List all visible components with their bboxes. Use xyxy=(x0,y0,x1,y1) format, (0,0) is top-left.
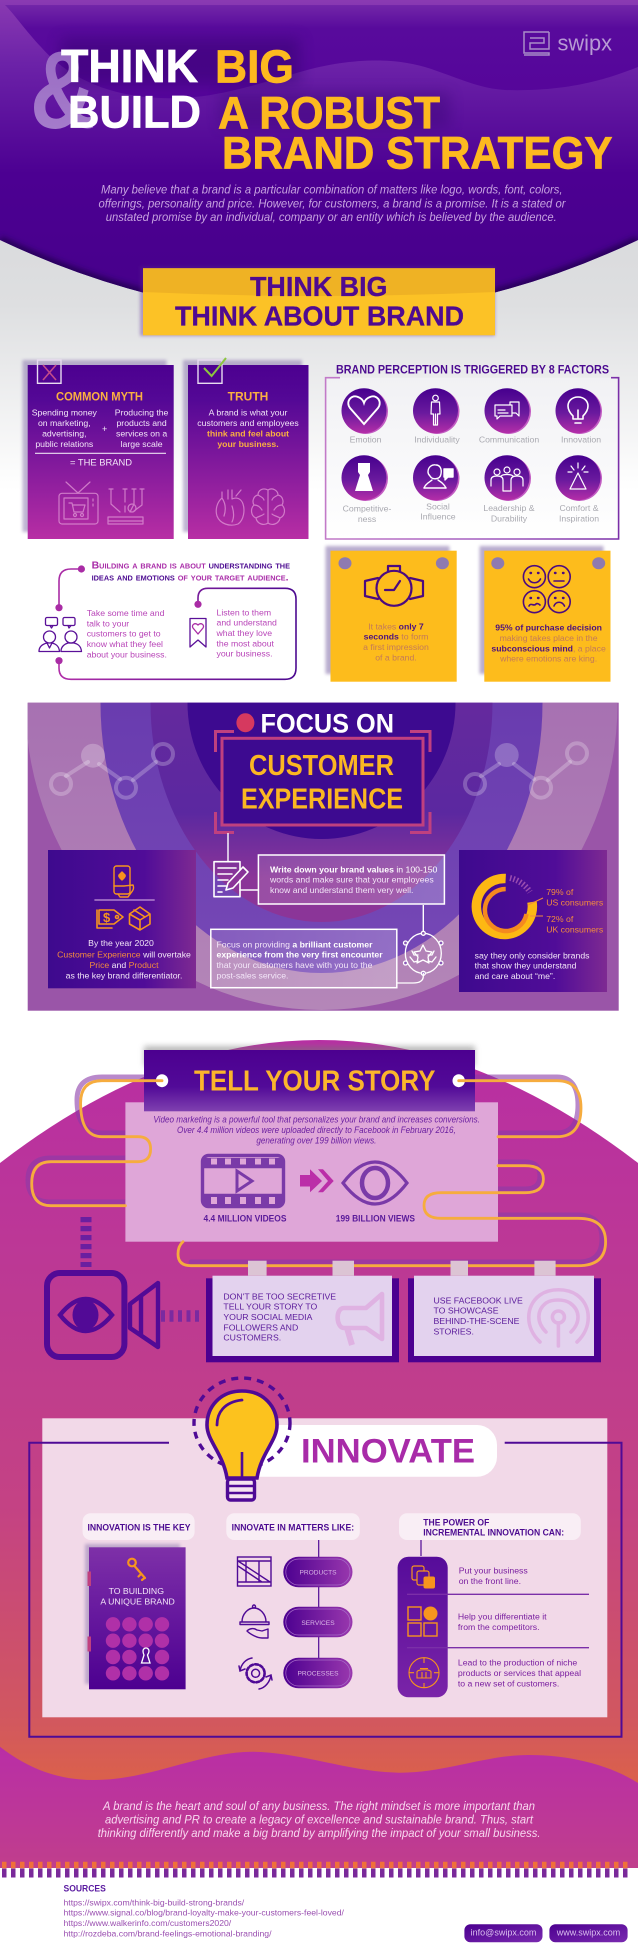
pill: power of incremental innovation: THE POWER OF xyxy=(423,1517,490,1527)
text: customer experience overtake xyxy=(57,938,191,980)
logo: swipx xyxy=(524,31,612,56)
dotted line: horizontal xyxy=(161,1310,202,1322)
box: brilliant experience: experience from the very first encounter xyxy=(216,950,383,960)
pill: innovate heading xyxy=(240,1425,497,1477)
text: purchase decision: 95% of purchase decision xyxy=(495,623,602,633)
text: take some time: talk to your xyxy=(87,618,129,628)
card: consumers xyxy=(459,850,607,992)
panel: tell your story xyxy=(125,1102,498,1242)
text: differentiate: Help you differentiate it xyxy=(458,1612,547,1622)
text: facebook live: BEHIND-THE-SCENE xyxy=(434,1316,520,1326)
card: don't be too secretive xyxy=(206,1261,399,1362)
factor: leadership: Durability xyxy=(491,513,528,523)
text: facebook live: USE FACEBOOK LIVE xyxy=(434,1295,523,1305)
button: website xyxy=(549,1924,628,1942)
pill: processes: PROCESSES xyxy=(297,1671,339,1678)
connector line: loop xyxy=(55,588,296,679)
text: customer experience overtake: as the key brand differentiator. xyxy=(66,970,182,980)
pill: power of incremental innovation: INCREMENTAL INNOVATION CAN: xyxy=(423,1528,564,1538)
icon: gears xyxy=(239,1658,272,1689)
title: BRAND STRATEGY xyxy=(222,127,612,178)
label: videos: 4.4 MILLION VIDEOS xyxy=(204,1214,286,1224)
title: BIG xyxy=(215,41,294,93)
icon: watch xyxy=(365,566,423,606)
heading: building a brand: ideas and emotions of your target audience. xyxy=(92,573,289,584)
text: listen to them: Listen to them xyxy=(216,607,271,617)
text: front line xyxy=(459,1566,528,1586)
text: take some time xyxy=(87,608,167,659)
story text: generating over 199 billion views. xyxy=(256,1135,376,1146)
factor: competitiveness: Competitive- xyxy=(343,504,391,514)
heading: brand perception: BRAND PERCEPTION IS TRIGGERED BY 8 FACTORS xyxy=(336,363,609,377)
text: take some time: customers to get to xyxy=(87,629,161,639)
story text: Over 4.4 million videos were uploaded directly to Facebook in February 2016, xyxy=(177,1125,456,1136)
icon: ribbon heart xyxy=(190,618,206,647)
text: 7 seconds: seconds to form xyxy=(364,632,428,642)
divider lines xyxy=(407,1594,589,1648)
tall pill with icons xyxy=(398,1557,448,1697)
myth right text: services on a xyxy=(116,429,167,439)
note: 95 percent xyxy=(480,546,610,682)
text: differentiate xyxy=(458,1612,547,1632)
conclusion text: advertising and PR to create a legacy of excellence and sustainable brand. Thus, start xyxy=(105,1812,534,1826)
box: brand values xyxy=(258,855,444,904)
box: brand values: words and make sure that your employees xyxy=(269,875,434,885)
sources: https://www.walkerinfo.com/customers2020/ xyxy=(64,1918,232,1928)
banner: think big think about brand xyxy=(140,266,495,336)
factor: social influence xyxy=(413,455,460,522)
intro text xyxy=(98,183,566,224)
text: consumers: and care about “me”. xyxy=(475,971,555,981)
icon: phone xyxy=(114,866,134,897)
factor: comfort xyxy=(556,455,602,523)
icon: people talking xyxy=(39,618,82,652)
panel: 8 factors xyxy=(326,378,619,539)
myth right text xyxy=(115,408,169,449)
logo: swipx: swipx xyxy=(558,31,612,56)
myth right text: Producing the xyxy=(115,408,169,418)
magenta background arc xyxy=(0,1040,638,1790)
truth text: customers and employees xyxy=(197,418,299,428)
text: purchase decision: making takes place in the xyxy=(500,633,598,643)
text: 7 seconds: a first impression xyxy=(363,642,429,652)
text: facebook live: STORIES. xyxy=(434,1326,474,1336)
factor: comfort: Inspiration xyxy=(559,513,599,523)
box: brilliant experience: Focus on providing a brilliant customer xyxy=(216,939,373,949)
icon: megaphone xyxy=(338,1294,382,1345)
text: to building: TO BUILDING xyxy=(109,1586,164,1596)
text: customer experience overtake: Customer Experience will overtake xyxy=(57,950,191,960)
rope shadow right xyxy=(191,1077,602,1262)
zipper edge xyxy=(2,1865,632,1873)
box: brand values: know and understand them very well. xyxy=(270,885,413,895)
text: take some time: know what they feel xyxy=(87,639,163,649)
text: niche products: to a new set of customers. xyxy=(458,1678,559,1688)
factor: competitiveness: ness xyxy=(358,514,377,524)
bottom wave xyxy=(0,1747,638,1868)
text: purchase decision: where emotions are king. xyxy=(499,654,597,664)
factor: communication xyxy=(479,388,539,444)
factor: individuality xyxy=(413,388,460,444)
arrow xyxy=(300,1169,334,1192)
truth text xyxy=(197,408,299,449)
text: customer experience overtake: By the year 2020 xyxy=(88,938,154,948)
sources: https://swipx.com/think-big-build-strong-brands/ xyxy=(64,1897,245,1907)
donut labels: US consumers xyxy=(546,897,604,907)
myth left text: on marketing, xyxy=(38,418,91,428)
icon: price tag and box xyxy=(97,907,150,930)
intro text: offerings, personality and price. However, for customers, a brand is a promise. It is a stated or xyxy=(98,196,566,210)
factor: communication: Communication xyxy=(479,434,539,444)
note: 7 seconds xyxy=(326,546,457,682)
gray backdrop band xyxy=(0,225,638,490)
icon: keyhole xyxy=(142,1648,150,1663)
sources: SOURCES xyxy=(64,1884,106,1894)
text: listen to them: the most about xyxy=(216,638,275,648)
icon: heart organ xyxy=(216,490,244,525)
text: niche products xyxy=(458,1658,581,1688)
title: THINK xyxy=(61,40,198,92)
icon: crate xyxy=(238,1557,271,1586)
frame: customer experience xyxy=(216,732,430,832)
heading: truth: TRUTH xyxy=(228,390,268,404)
box: brilliant experience xyxy=(211,929,397,988)
box: brilliant experience: that your customers have with you to the xyxy=(216,960,373,970)
banner: think big think about brand: THINK ABOUT BRAND xyxy=(175,301,464,332)
text: consumers xyxy=(475,950,590,981)
myth left text: public relations xyxy=(35,439,94,449)
heading: building a brand: Building a brand is about understanding the xyxy=(92,560,290,571)
icon: eye xyxy=(343,1162,407,1204)
text: secretive xyxy=(223,1291,336,1343)
conclusion text: A brand is the heart and soul of any business. The right mindset is more important than xyxy=(102,1799,535,1813)
header panel xyxy=(0,0,638,316)
text: listen to them: and understand xyxy=(216,618,277,628)
icon: shapes xyxy=(408,1606,438,1636)
text: purchase decision: subconscious mind, a place xyxy=(491,643,606,653)
donut labels: UK consumers xyxy=(546,924,604,934)
factor: innovation: Innovation xyxy=(561,434,601,444)
heading: focus on: FOCUS ON xyxy=(260,709,394,739)
banner: think big think about brand: THINK BIG xyxy=(250,271,388,302)
factor: comfort: Comfort & xyxy=(559,503,599,513)
truth text: your business. xyxy=(217,439,279,449)
text: secretive: YOUR SOCIAL MEDIA xyxy=(223,1312,313,1322)
myth left text: Spending money xyxy=(32,408,98,418)
text: secretive: TELL YOUR STORY TO xyxy=(223,1302,317,1312)
intro text: Many believe that a brand is a particular combination of matters like logo, words, font, colors, xyxy=(101,183,562,197)
panel: common myth xyxy=(22,360,174,539)
text: differentiate: from the competitors. xyxy=(458,1622,540,1632)
truth text: think and feel about xyxy=(207,429,289,439)
title ampersand: & xyxy=(30,29,96,152)
pill: innovation is the key xyxy=(83,1513,195,1540)
sources: http://rozdeba.com/brand-feelings-emotional-branding/ xyxy=(64,1928,272,1938)
icon: check box xyxy=(198,358,226,383)
pill: services: SERVICES xyxy=(301,1620,335,1627)
factor: social influence: Social xyxy=(426,501,450,511)
intro text: unstated promise by an individual, company or an entity which is believed by the audience. xyxy=(106,210,557,224)
icon: cloche xyxy=(240,1605,269,1638)
donut labels: 72% of xyxy=(546,914,574,924)
banner: tell your story: TELL YOUR STORY xyxy=(194,1066,436,1098)
pill: services xyxy=(283,1607,352,1637)
text: secretive: DON'T BE TOO SECRETIVE xyxy=(223,1291,336,1301)
plus sign: + xyxy=(102,424,107,434)
factor: emotion: Emotion xyxy=(350,434,382,444)
text: secretive: FOLLOWERS AND xyxy=(223,1322,298,1332)
dollar sign: $ xyxy=(103,910,111,925)
donut labels xyxy=(546,887,604,934)
text: 7 seconds xyxy=(363,621,429,662)
text: listen to them xyxy=(216,607,277,659)
sources xyxy=(64,1884,345,1938)
text: unique brand: A UNIQUE BRAND xyxy=(100,1596,175,1606)
title xyxy=(61,40,612,178)
pill: power of incremental innovation xyxy=(399,1513,581,1540)
text: facebook live xyxy=(434,1295,523,1336)
icon: light bulb xyxy=(194,1378,290,1500)
box: brilliant experience: post-sales service. xyxy=(216,970,288,980)
icon: broadcast xyxy=(529,1290,588,1346)
myth right text: products and xyxy=(116,418,167,428)
icon: brain xyxy=(252,489,284,524)
text: niche products: products or services that appeal xyxy=(458,1668,581,1678)
text: consumers: that show they understand xyxy=(475,961,577,971)
factor: leadership: Leadership & xyxy=(483,503,535,513)
icon: tv xyxy=(59,482,98,524)
card: year 2020 xyxy=(48,850,196,988)
text: 7 seconds: of a brand. xyxy=(375,652,417,662)
heading: building a brand xyxy=(92,560,290,584)
myth right text: large scale xyxy=(121,439,163,449)
story text: Video marketing is a powerful tool that personalizes your brand and increases conversions. xyxy=(153,1115,480,1126)
button: email xyxy=(464,1924,542,1942)
panel: innovate xyxy=(29,1378,622,1737)
panel: truth xyxy=(183,358,308,539)
myth left text xyxy=(32,408,98,449)
concentric arcs xyxy=(28,702,618,1010)
heading: common myth: COMMON MYTH xyxy=(56,390,143,404)
icon: star ring xyxy=(397,931,443,983)
pill: products xyxy=(283,1557,352,1587)
icon: target xyxy=(409,1658,439,1688)
the brand equation: = THE BRAND xyxy=(70,457,132,468)
rope left xyxy=(32,1081,162,1206)
donut chart xyxy=(476,878,543,934)
banner: tell your story xyxy=(144,1046,475,1111)
icon: faces xyxy=(523,566,570,613)
factor: competitiveness xyxy=(342,455,391,524)
text: 7 seconds: It takes only 7 xyxy=(368,621,424,631)
donut labels: 79% of xyxy=(546,887,574,897)
factor: social influence: Influence xyxy=(420,512,456,522)
conclusion text xyxy=(98,1799,540,1840)
text: niche products: Lead to the production of niche xyxy=(458,1658,577,1668)
rope right xyxy=(178,1081,606,1266)
icon: video camera xyxy=(47,1273,158,1357)
text: listen to them: what they love xyxy=(216,628,272,638)
factor: individuality: Individuality xyxy=(414,434,460,444)
rope shadow left xyxy=(28,1077,162,1202)
truth text: A brand is what your xyxy=(209,408,287,418)
text: consumers: say they only consider brands xyxy=(475,950,590,960)
label: views: 199 BILLION VIEWS xyxy=(336,1214,415,1224)
connector line: left top xyxy=(55,565,85,611)
factor: innovation xyxy=(556,388,602,444)
text: front line: Put your business xyxy=(459,1566,528,1576)
sources: https://www.signal.co/blog/brand-loyalty-make-your-customers-feel-loved/ xyxy=(64,1908,345,1918)
panel: focus on customer experience xyxy=(28,702,619,1011)
icon: document and pencil xyxy=(214,862,258,897)
text: take some time: Take some time and xyxy=(87,608,165,618)
network graphic right xyxy=(465,743,587,798)
pill: innovation is the key: INNOVATION IS THE KEY xyxy=(88,1522,190,1532)
text: facebook live: TO SHOWCASE xyxy=(434,1306,499,1316)
icon: film xyxy=(202,1156,284,1206)
factor: leadership xyxy=(483,455,535,523)
text: purchase decision xyxy=(491,623,606,664)
text: customer experience overtake: Price and Product xyxy=(89,960,159,970)
dotted line: vertical xyxy=(80,1217,92,1267)
frame: customer experience: EXPERIENCE xyxy=(241,783,403,815)
book: to building a unique brand xyxy=(85,1544,186,1689)
button: website: www.swipx.com xyxy=(556,1927,620,1937)
pill: processes xyxy=(283,1658,352,1688)
box: brand values: Write down your brand values in 100-150 xyxy=(270,864,438,874)
card: facebook live xyxy=(408,1261,601,1362)
factor: emotion xyxy=(342,388,388,444)
frame: customer experience: CUSTOMER xyxy=(249,750,394,782)
text: listen to them: your business. xyxy=(216,649,273,659)
conclusion text: thinking differently and make a big brand by amplifying the impact of your small business. xyxy=(98,1826,540,1840)
pill: products: PRODUCTS xyxy=(300,1569,337,1576)
icon: x checkbox xyxy=(38,360,61,383)
text: take some time: about your business. xyxy=(87,649,167,659)
icon: robot arms xyxy=(108,489,144,524)
text: front line: on the front line. xyxy=(459,1576,521,1586)
pill: innovate in matters like: INNOVATE IN MATTERS LIKE: xyxy=(232,1522,354,1532)
button: email: info@swipx.com xyxy=(471,1927,536,1937)
title: A ROBUST xyxy=(218,87,440,138)
icon: key xyxy=(128,1559,145,1580)
myth left text: advertising, xyxy=(42,429,87,439)
pill: innovate in matters like xyxy=(226,1513,360,1540)
title: BUILD xyxy=(68,86,201,138)
keypad xyxy=(106,1617,169,1681)
text: secretive: CUSTOMERS. xyxy=(223,1333,281,1343)
story text xyxy=(153,1115,480,1146)
network graphic left xyxy=(51,744,173,798)
icon: copies xyxy=(412,1566,435,1588)
pill: innovate heading: INNOVATE xyxy=(301,1433,475,1471)
